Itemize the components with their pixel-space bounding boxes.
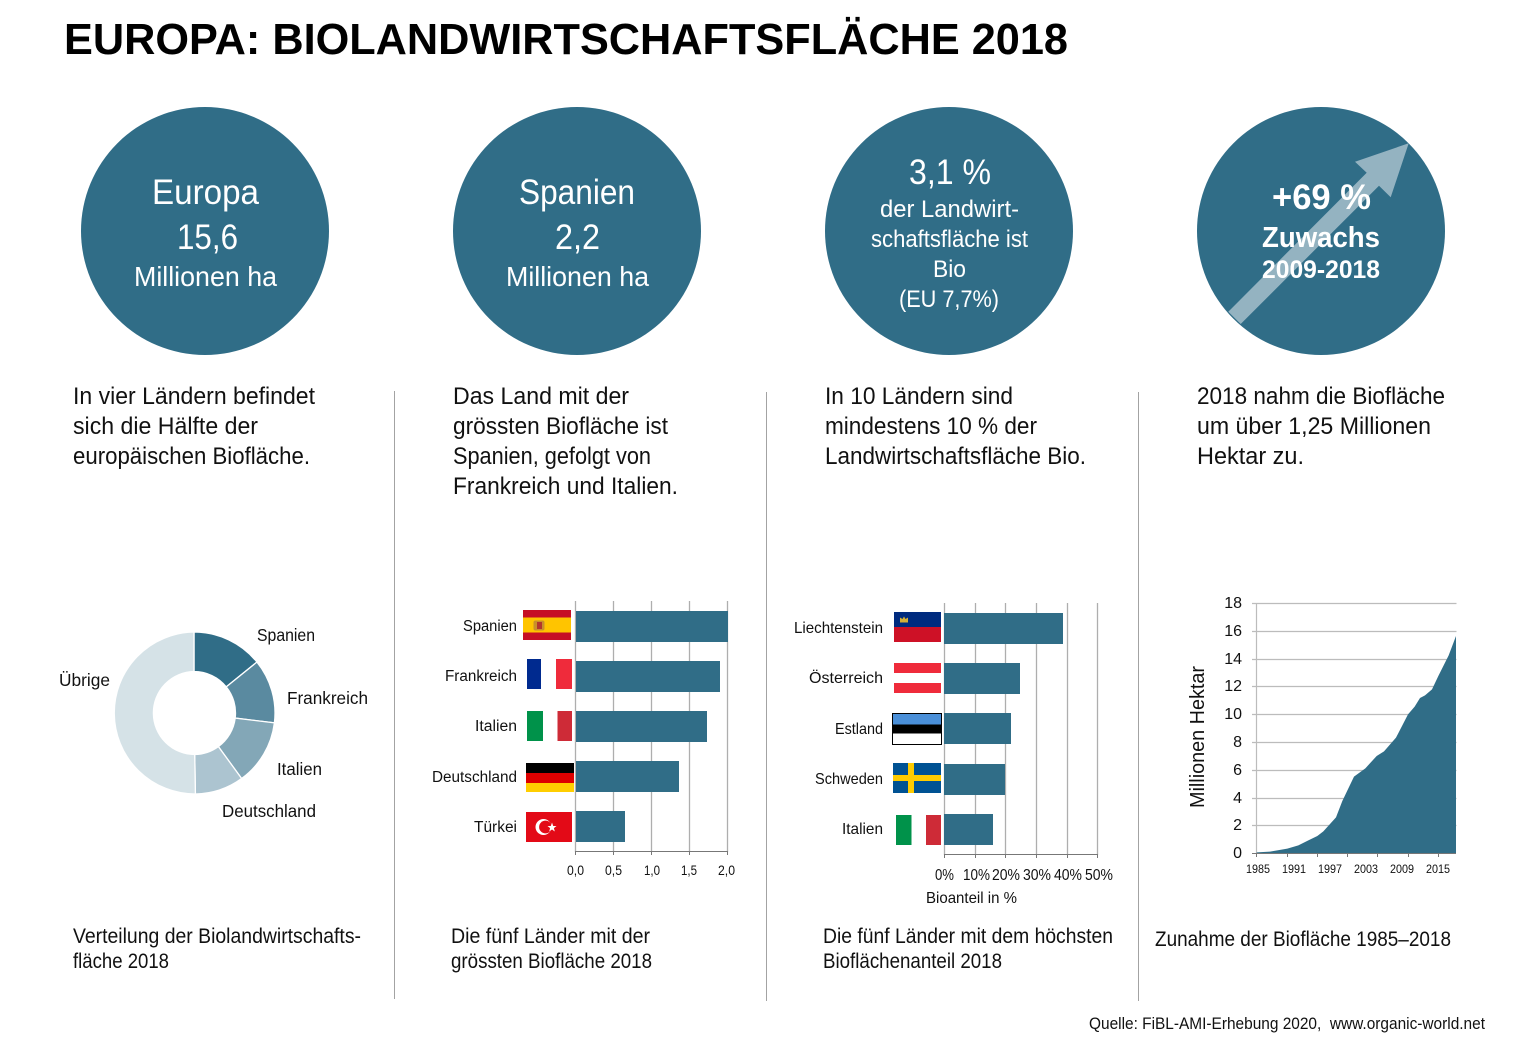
- area chart: Zunahme der Biofläche: 10: [1224, 706, 1242, 723]
- panel: Spanien circle: Spanien: [519, 173, 635, 212]
- text block: column 4: [1197, 383, 1445, 470]
- area chart: Zunahme der Biofläche: 2009: [1390, 862, 1414, 876]
- bar chart: grösste Biofläche: Deutschland: [432, 769, 517, 786]
- donut chart: Verteilung: Frankreich: [287, 688, 368, 708]
- text block: column 3: In 10 Ländern sind: [825, 383, 1013, 410]
- bar chart: höchster Bioanteil: 30%: [1023, 867, 1051, 884]
- area chart: Zunahme der Biofläche: 14: [1224, 651, 1242, 668]
- donut chart: Verteilung: Übrige: [59, 670, 110, 690]
- icon: flag Estonia: [892, 714, 942, 744]
- caption: donut chart: [73, 925, 361, 973]
- panel: Bioanteil circle: [825, 107, 1073, 355]
- donut chart: Verteilung: Italien: [277, 759, 322, 779]
- area chart: Zunahme der Biofläche: 8: [1233, 734, 1242, 751]
- panel: Europa circle: Millionen ha: [134, 261, 277, 292]
- text block: column 4: 2018 nahm die Biofläche: [1197, 383, 1445, 410]
- bar chart: grösste Biofläche: 0,0: [567, 862, 584, 878]
- panel: Europa circle: 15,6: [177, 218, 238, 257]
- bar chart: höchster Bioanteil: Estland: [835, 721, 883, 738]
- area chart: Zunahme der Biofläche: 6: [1233, 762, 1242, 779]
- bar chart: höchster Bioanteil: Bioanteil in %: [926, 890, 1017, 907]
- icon: flag France: [527, 659, 572, 689]
- area chart: Zunahme der Biofläche: Millionen Hektar: [1187, 666, 1209, 808]
- area chart: Zunahme der Biofläche: 2: [1233, 817, 1242, 834]
- icon: growth arrow: [1228, 143, 1409, 324]
- bar chart: grösste Biofläche: 2,0: [718, 862, 735, 878]
- bar chart: grösste Biofläche: 1,5: [681, 862, 697, 878]
- panel: Bioanteil circle: der Landwirt-: [880, 196, 1019, 223]
- area chart: Zunahme der Biofläche: 2003: [1354, 862, 1378, 876]
- text block: column 1: sich die Hälfte der: [73, 413, 258, 440]
- bar chart: höchster Bioanteil: 50%: [1085, 867, 1113, 884]
- panel: Zuwachs circle: 2009-2018: [1262, 256, 1380, 284]
- text block: column 1: In vier Ländern befindet: [73, 383, 315, 410]
- bar chart: grösste Biofläche: 0,5: [605, 862, 622, 878]
- panel: Europa circle: Europa: [152, 173, 259, 212]
- area chart: Zunahme der Biofläche: 18: [1224, 595, 1242, 612]
- bar chart: grösste Biofläche: [432, 601, 735, 878]
- icon: flag Turkey: [526, 812, 572, 842]
- text block: column 2: grössten Biofläche ist: [453, 413, 668, 440]
- bar chart: höchster Bioanteil: 10%: [963, 867, 990, 884]
- panel: Bioanteil circle: schaftsfläche ist: [871, 226, 1028, 253]
- caption: höchster Bioanteil: Die fünf Länder mit dem höchsten: [823, 925, 1113, 948]
- area chart: Zunahme der Biofläche: 1991: [1282, 862, 1306, 876]
- caption: grösste Biofläche: grössten Biofläche 2018: [451, 950, 652, 973]
- text block: column 2: [453, 383, 678, 500]
- icon: flag Italy: [527, 711, 572, 741]
- caption: grösste Biofläche: [451, 925, 652, 973]
- panel: Zuwachs circle: +69 %: [1272, 178, 1371, 217]
- source note: Quelle: FiBL-AMI-Erhebung 2020, www.organic-world.net: [1089, 1015, 1485, 1033]
- text block: column 3: mindestens 10 % der: [825, 413, 1037, 440]
- bar chart: grösste Biofläche: 1,0: [644, 862, 660, 878]
- text block: column 2: Spanien, gefolgt von: [453, 443, 651, 470]
- text block: column 1: europäischen Biofläche.: [73, 443, 310, 470]
- bar chart: höchster Bioanteil: Schweden: [815, 771, 883, 788]
- text block: column 4: Hektar zu.: [1197, 443, 1304, 470]
- bar chart: höchster Bioanteil: 0%: [935, 867, 954, 884]
- area chart: Zunahme der Biofläche: 1985: [1246, 862, 1270, 876]
- icon: flag Germany: [526, 763, 574, 792]
- panel: Bioanteil circle: 3,1 %: [909, 153, 991, 192]
- icon: flag Liechtenstein: [894, 612, 941, 642]
- area chart: Zunahme der Biofläche: 16: [1224, 623, 1242, 640]
- panel: Spanien circle: Millionen ha: [506, 261, 649, 292]
- area chart: Zunahme der Biofläche: 2015: [1426, 862, 1450, 876]
- bar chart: höchster Bioanteil: 20%: [992, 867, 1020, 884]
- panel: Bioanteil circle: Bio: [933, 256, 966, 283]
- panel: Europa circle: [81, 107, 329, 355]
- area chart: Zunahme der Biofläche: 4: [1233, 790, 1242, 807]
- bar chart: grösste Biofläche: Frankreich: [445, 668, 517, 685]
- donut chart: Verteilung: [59, 625, 368, 821]
- title: EUROPA: BIOLANDWIRTSCHAFTSFLÄCHE 2018: [64, 15, 1068, 64]
- icon: flag Italy: [896, 815, 941, 845]
- panel: Bioanteil circle: (EU 7,7%): [899, 286, 999, 313]
- icon: flag Spain: [523, 610, 571, 640]
- panel: Zuwachs circle: Zuwachs: [1262, 222, 1380, 254]
- caption: grösste Biofläche: Die fünf Länder mit der: [451, 925, 650, 948]
- caption: höchster Bioanteil: [823, 925, 1113, 973]
- text block: column 1: [73, 383, 315, 470]
- bar chart: grösste Biofläche: Spanien: [463, 618, 517, 635]
- area chart: Zunahme der Biofläche: [1187, 595, 1456, 876]
- text block: column 2: Das Land mit der: [453, 383, 629, 410]
- bar chart: grösste Biofläche: Türkei: [474, 819, 517, 836]
- panel: Spanien circle: 2,2: [555, 218, 600, 257]
- donut chart: Verteilung: Spanien: [257, 625, 315, 645]
- area chart: Zunahme der Biofläche: 12: [1224, 678, 1242, 695]
- area chart: Zunahme der Biofläche: 1997: [1318, 862, 1342, 876]
- bar chart: grösste Biofläche: Italien: [475, 718, 517, 735]
- bar chart: höchster Bioanteil: Österreich: [809, 669, 883, 687]
- caption: Zunahme: Zunahme der Biofläche 1985–2018: [1155, 928, 1451, 951]
- caption: donut chart: fläche 2018: [73, 950, 169, 973]
- text block: column 3: Landwirtschaftsfläche Bio.: [825, 443, 1086, 470]
- bar chart: höchster Bioanteil: Liechtenstein: [794, 620, 883, 637]
- panel: Zuwachs circle: [1197, 107, 1445, 355]
- area chart: Zunahme der Biofläche: 0: [1233, 845, 1242, 862]
- bar chart: höchster Bioanteil: Italien: [842, 821, 883, 838]
- text block: column 2: Frankreich und Italien.: [453, 473, 678, 500]
- bar chart: höchster Bioanteil: [794, 603, 1113, 907]
- panel: Spanien circle: [453, 107, 701, 355]
- text block: column 4: um über 1,25 Millionen: [1197, 413, 1431, 440]
- icon: flag Austria: [894, 663, 941, 693]
- icon: flag Sweden: [893, 763, 941, 793]
- bar chart: höchster Bioanteil: 40%: [1054, 867, 1082, 884]
- donut chart: Verteilung: Deutschland: [222, 801, 316, 821]
- caption: höchster Bioanteil: Bioflächenanteil 2018: [823, 950, 1002, 973]
- text block: column 3: [825, 383, 1086, 470]
- caption: donut chart: Verteilung der Biolandwirtschafts-: [73, 925, 361, 948]
